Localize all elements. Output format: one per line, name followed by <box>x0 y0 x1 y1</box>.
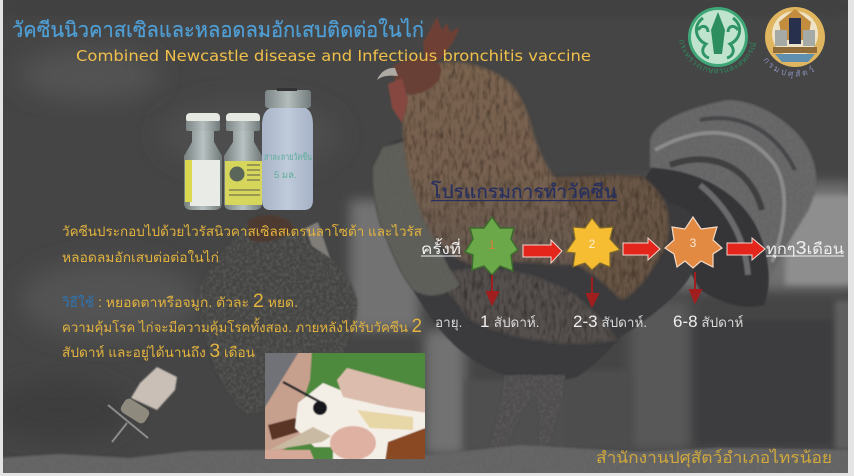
arrow: step 2 to 3 <box>623 238 660 260</box>
chest speckles <box>373 140 460 295</box>
description text: วัคซีนประกอบไปด้วยไวรัสนิวคาสเซิลสเตรนลาโซต้า และไวรัส <box>62 223 422 239</box>
rooster tail <box>650 100 816 277</box>
rooster legs <box>488 375 565 460</box>
arrow: down to age 3 <box>690 272 701 302</box>
diluent bottle <box>262 88 313 210</box>
step 1 star: 1 <box>489 238 496 252</box>
label: dose number: ครั้งที่ <box>421 238 461 258</box>
label: every 3 months: ทุกๆ3เดือน <box>766 238 844 259</box>
ground <box>0 445 854 476</box>
arrow: down to age 2 <box>587 277 598 306</box>
step 1 star <box>465 217 518 275</box>
heading: vaccination program: โปรแกรมการทำวัคซีน <box>431 180 617 203</box>
description text: หลอดลมอักเสบต่อต่อในไก่ <box>62 249 219 265</box>
rooster head and comb <box>423 17 460 62</box>
arrow: down to age 1 <box>487 275 498 304</box>
step 2 star: 2 <box>589 237 596 251</box>
step 3 star <box>665 217 722 268</box>
logo: department of livestock: กรมปศุสัตว์ <box>764 58 814 79</box>
footer: livestock office credit: สำนักงานปศุสัตว์อำเภอไทรน้อย <box>596 448 832 468</box>
photo: eye-drop vaccination on chick <box>262 350 428 462</box>
usage and immunity text <box>62 291 422 362</box>
neck hackle <box>403 62 590 267</box>
age label: 1 week: อายุ. <box>435 315 462 330</box>
step 2 star <box>566 218 620 270</box>
age label: 6-8 weeks: 6-8 สัปดาห์ <box>673 312 743 331</box>
vial 2 <box>224 113 262 210</box>
rooster body <box>373 120 701 381</box>
age label: 2-3 weeks: 2-3 สัปดาห์. <box>573 312 647 331</box>
usage and immunity text: วิธีใช้ <box>62 294 94 310</box>
title: Thai heading: วัคซีนนิวคาสเซิลและหลอดลมอักเสบติดต่อในไก่ <box>12 18 424 42</box>
logo: ministry of agriculture: กระทรวงเกษตรและสหกรณ์ <box>679 40 756 74</box>
saddle hackle <box>529 175 669 300</box>
step 3 star: 3 <box>690 236 697 250</box>
usage and immunity text: : หยอดตาหรือจมูก. ตัวละ 2 หยด. <box>98 291 298 312</box>
wing <box>435 268 618 344</box>
arrow: step 1 to 2 <box>523 240 562 263</box>
logos <box>679 7 825 79</box>
subtitle: English heading: Combined Newcastle disease and Infectious bronchitis vaccine <box>76 47 591 65</box>
vaccine vials photo <box>184 88 313 210</box>
logo: ministry of agriculture <box>679 7 756 74</box>
usage and immunity text: ความคุ้มโรค ไก่จะมีความคุ้มโรคทั้งสอง. ภายหลังได้รับวัคซีน 2 <box>62 316 422 337</box>
diluent bottle: สาละลายวัคซีน <box>264 151 312 163</box>
diluent bottle: 5 มล. <box>274 170 297 181</box>
usage and immunity text: สัปดาห์ และอยู่ได้นานถึง 3 เดือน <box>62 341 255 362</box>
logo: department of livestock <box>764 7 825 79</box>
age label: 1 week: 1 <box>480 312 489 331</box>
description text <box>62 223 422 265</box>
icon: wing web applicator bottle <box>108 367 177 442</box>
age label: 1 week: สัปดาห์. <box>490 314 540 330</box>
arrow: step 3 onward <box>727 238 765 260</box>
vial 1 <box>184 113 222 210</box>
hen <box>197 215 357 413</box>
